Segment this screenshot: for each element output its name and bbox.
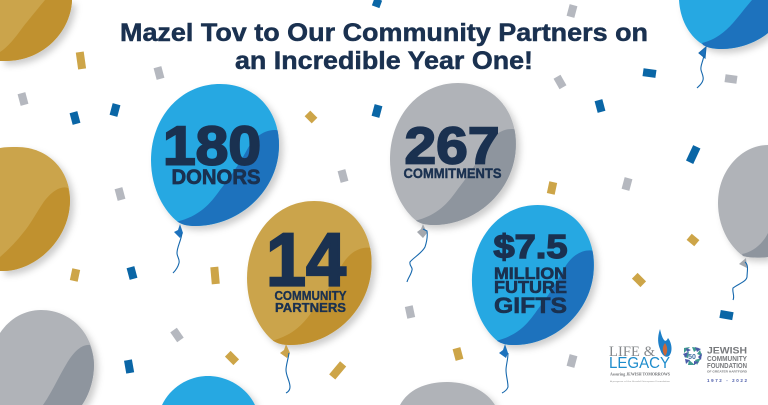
label: commitments: COMMITMENTS	[404, 165, 502, 181]
balloon: gold top left, cropped	[0, 0, 72, 61]
number: 267: 267	[404, 118, 500, 176]
number: 180: 180	[163, 114, 261, 176]
icon: flame	[658, 329, 672, 357]
title: Mazel Tov to Our Community Partners on	[120, 19, 648, 47]
logo: Jewish Community Foundation: COMMUNITY	[707, 356, 747, 363]
balloon: 180 donors	[151, 84, 285, 273]
label: community partners	[274, 288, 347, 315]
balloon: 14 community partners	[247, 201, 377, 393]
balloon knot and string	[173, 224, 183, 273]
label: donors: DONORS	[172, 166, 260, 189]
balloon shading	[416, 129, 516, 225]
number: 14: 14	[266, 218, 346, 302]
label: community partners: PARTNERS	[275, 300, 346, 315]
title	[120, 19, 648, 75]
logo: Jewish Community Foundation: FOUNDATION	[707, 363, 747, 370]
balloon: gray right, cropped	[718, 145, 768, 300]
balloon: gray bottom, cropped	[400, 382, 495, 405]
logo: Life and Legacy	[609, 329, 672, 383]
icon: 50 star: 50	[688, 354, 696, 361]
balloon shading	[497, 250, 594, 345]
balloon knot and string	[499, 344, 508, 393]
title: an Incredible Year One!	[235, 47, 533, 75]
balloon body	[472, 205, 594, 345]
logo: Jewish Community Foundation: 1972 - 2022	[707, 378, 747, 383]
balloon knot and string	[407, 224, 427, 282]
logo: Life and Legacy: A program of the Harold Grinspoon Foundation	[610, 380, 671, 383]
logo: Life and Legacy: Assuring JEWISH TOMORROWS	[610, 372, 670, 376]
balloon body	[390, 83, 516, 225]
label: million future gifts: GIFTS	[494, 293, 567, 318]
balloon: gray bottom left, cropped	[0, 310, 94, 405]
logo: Jewish Community Foundation: OF GREATER HARTFORD	[707, 370, 748, 374]
logo: Life and Legacy: LIFE &	[609, 344, 656, 360]
balloon body	[151, 84, 279, 226]
balloon: blue top right, cropped	[679, 0, 768, 88]
label: million future gifts	[494, 265, 567, 318]
balloon: blue bottom, cropped	[162, 376, 255, 405]
balloon shading	[178, 130, 279, 226]
balloon knot and string	[697, 47, 706, 88]
balloon: $7.5 million future gifts	[472, 205, 600, 393]
label: community partners: COMMUNITY	[274, 288, 347, 303]
balloon body	[247, 201, 372, 345]
balloon: gold left, cropped	[0, 147, 70, 271]
number: $7.5: $7.5	[494, 228, 568, 265]
balloon shading	[273, 248, 372, 345]
logo: Life and Legacy: LEGACY	[609, 355, 670, 372]
balloon: 267 commitments	[390, 83, 522, 282]
label: million future gifts: MILLION	[494, 265, 567, 283]
label: million future gifts: FUTURE	[494, 277, 567, 297]
logo: Jewish Community Foundation	[683, 346, 748, 383]
balloon knot and string	[733, 258, 748, 300]
logo: Jewish Community Foundation: JEWISH	[707, 346, 747, 356]
balloon knot and string	[280, 344, 290, 393]
